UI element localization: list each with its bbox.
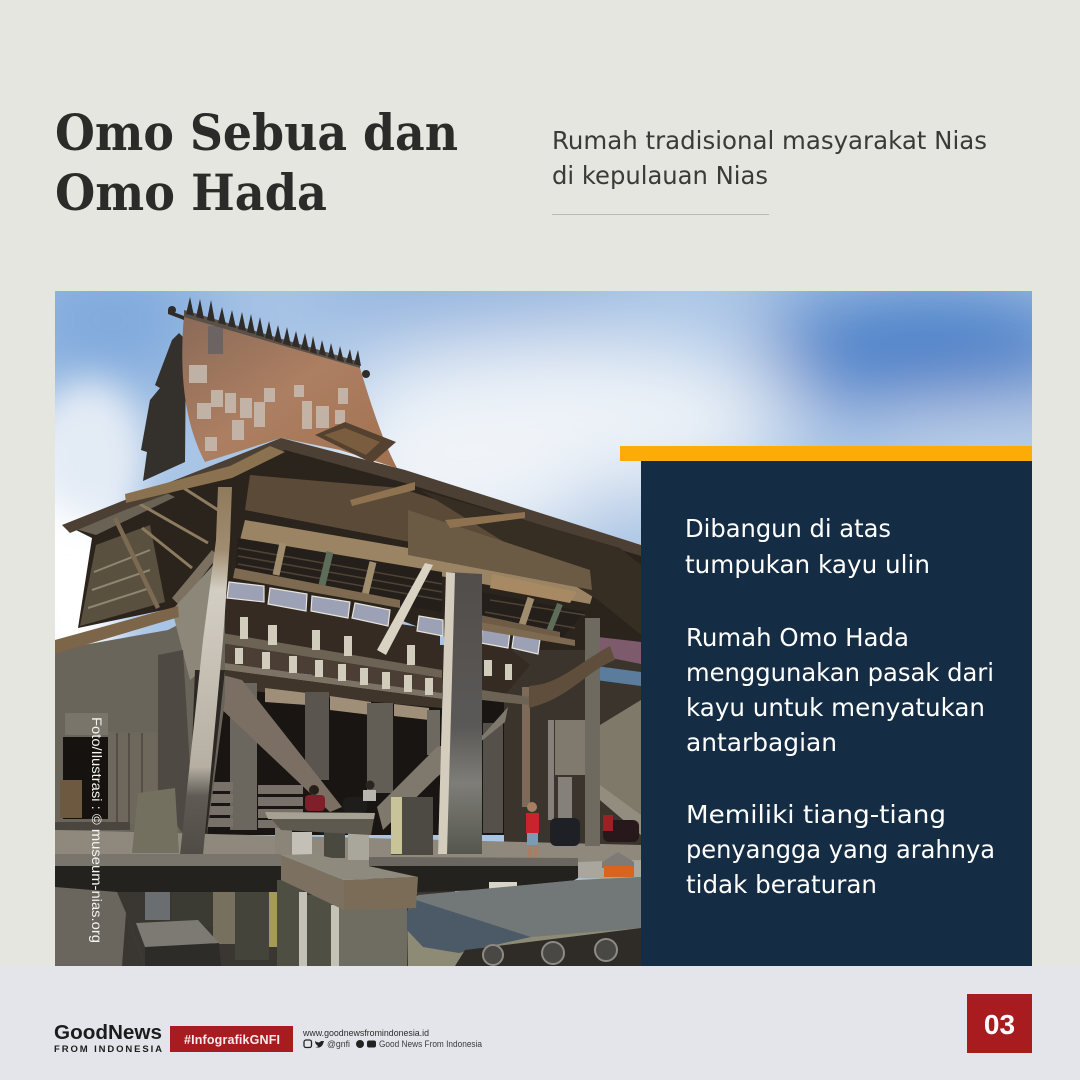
subtitle: di kepulauan Nias xyxy=(552,161,768,190)
tan lintels between columns xyxy=(265,688,429,720)
title xyxy=(55,103,458,222)
roof underside mass xyxy=(76,450,641,675)
hashtag badge: #InfografikGNFI xyxy=(184,1033,280,1047)
logo: GoodNews from Indonesia xyxy=(54,1022,162,1055)
roof ridge spikes xyxy=(168,297,370,378)
bottom-left rocks xyxy=(55,887,221,966)
motorcycles xyxy=(550,815,639,846)
fact 1: Dibangun di atas xyxy=(685,514,891,543)
icon: facebook xyxy=(356,1040,364,1048)
upper roof: rusted surface xyxy=(182,310,397,468)
right paved slab xyxy=(407,877,641,966)
left gable slats and rafters xyxy=(72,487,218,626)
fact 2: kayu untuk menyatukan xyxy=(686,693,985,722)
stone bench foreground xyxy=(277,854,418,966)
upper roof: rear dark tiers xyxy=(141,333,186,481)
hashtag badge xyxy=(170,1026,293,1052)
carved panels and floor beams xyxy=(218,563,575,708)
fact 3: penyangga yang arahnya xyxy=(686,835,995,864)
upper wooden beams xyxy=(240,475,641,635)
lower roof surface xyxy=(62,422,641,556)
footer band xyxy=(0,966,1080,1080)
subtitle: Rumah tradisional masyarakat Nias xyxy=(552,126,987,155)
page number: 03 xyxy=(984,1009,1015,1040)
lower left building xyxy=(55,560,225,850)
photo: traditional Nias house xyxy=(55,291,1032,966)
stone table xyxy=(265,812,375,860)
fact 3: Memiliki tiang-tiang xyxy=(686,800,946,829)
logo: GoodNews from Indonesia: GoodNews xyxy=(54,1022,162,1044)
fact 2: antarbagian xyxy=(686,728,837,757)
title: Omo Hada xyxy=(55,163,327,222)
fact 3: tidak beraturan xyxy=(686,870,877,899)
rafters and slats xyxy=(233,538,585,640)
page number xyxy=(967,994,1032,1053)
people xyxy=(305,780,539,857)
diagonal braces xyxy=(215,673,508,830)
orange-shirt person xyxy=(602,852,634,877)
fact 2: Rumah Omo Hada xyxy=(686,623,909,652)
subtitle xyxy=(552,126,987,190)
icon: youtube xyxy=(367,1040,376,1048)
steps xyxy=(205,782,303,828)
panel: key facts xyxy=(620,446,1032,966)
sky xyxy=(55,291,1032,892)
ground xyxy=(55,830,641,880)
website and social handles: Good News From Indonesia xyxy=(379,1039,482,1049)
curved wooden beam xyxy=(529,646,615,708)
website and social handles: www.goodnewsfromindonesia.id xyxy=(302,1028,429,1039)
icon: instagram xyxy=(304,1040,312,1048)
dark slabs xyxy=(55,854,641,892)
right thin pole xyxy=(585,618,600,846)
under-bench background xyxy=(117,890,455,966)
large stone pillar xyxy=(438,572,482,854)
bench supports xyxy=(145,892,279,960)
underfloor columns xyxy=(230,683,503,833)
underfloor dark void xyxy=(205,675,505,835)
fact 1: tumpukan kayu ulin xyxy=(685,550,930,579)
right background structure xyxy=(504,637,641,850)
icon: twitter xyxy=(315,1041,324,1048)
fact 1 xyxy=(685,514,930,579)
logo: GoodNews from Indonesia: FROM INDONESIA xyxy=(54,1044,162,1055)
square stone xyxy=(391,797,433,855)
fact 3 xyxy=(686,800,995,899)
left standing stone xyxy=(132,788,179,853)
website and social handles xyxy=(302,1028,482,1049)
title: Omo Sebua dan xyxy=(55,103,458,162)
main light pillar xyxy=(180,487,232,855)
fact 2: menggunakan pasak dari xyxy=(686,658,994,687)
fact 2 xyxy=(686,623,994,757)
accent bar xyxy=(620,446,1032,461)
photo credit: Foto/Ilustrasi : © museum-nias.org xyxy=(89,717,104,943)
website and social handles: @gnfi xyxy=(327,1039,350,1049)
